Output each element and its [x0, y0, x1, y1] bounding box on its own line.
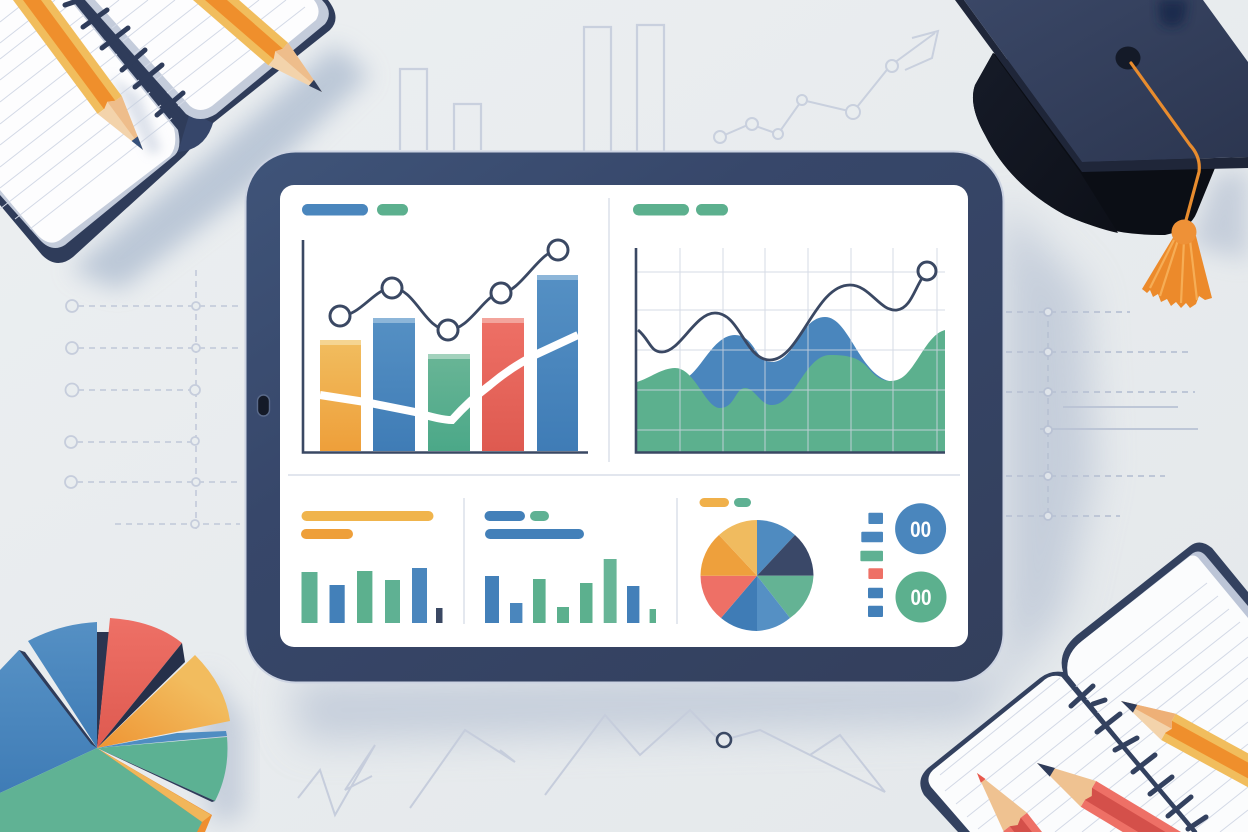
skull cap	[973, 53, 1215, 235]
tablet body	[246, 152, 1004, 682]
panel: pie and legend	[700, 498, 946, 631]
decorative left timeline	[65, 270, 240, 530]
green value badge	[896, 572, 946, 622]
notebook covers	[920, 542, 1248, 832]
blue area	[682, 317, 895, 452]
dark edge slice	[19, 650, 97, 748]
board spot	[1158, 0, 1188, 27]
bars	[302, 568, 442, 623]
graduation cap top right	[955, 0, 1248, 308]
tablet	[246, 152, 1004, 682]
large green slice	[0, 748, 202, 832]
decorative background bar chart	[400, 25, 664, 152]
cap button	[1116, 46, 1140, 70]
yellow slice	[97, 655, 230, 748]
right page	[95, 0, 319, 110]
header pills	[302, 204, 408, 216]
tassel	[1142, 220, 1212, 308]
blue slice	[28, 622, 97, 748]
tassel knob	[1172, 220, 1196, 244]
notebook bottom right	[920, 542, 1248, 832]
header pills	[700, 498, 751, 507]
header pills	[301, 511, 434, 539]
ruled lines	[940, 583, 1248, 832]
spiral binding	[65, 0, 183, 120]
large blue slice	[0, 650, 97, 793]
chart axes	[303, 240, 588, 452]
blue value badge: 00	[910, 517, 931, 542]
bars	[485, 559, 656, 623]
dark sliver	[97, 632, 109, 748]
dark wedge	[97, 643, 185, 748]
blue value badge	[895, 503, 946, 554]
yellow pencil	[1121, 701, 1248, 787]
hinge blob	[178, 112, 213, 152]
pie chart	[700, 520, 814, 631]
upper page	[1067, 556, 1248, 832]
orange edge	[97, 748, 212, 832]
dark trend line	[638, 271, 927, 360]
pencil shadow	[110, 75, 162, 155]
green value badge: 00	[910, 585, 932, 610]
header pills	[633, 204, 728, 216]
yellow edge	[100, 750, 211, 822]
decorative bottom line charts	[298, 710, 885, 815]
lower page	[928, 676, 1195, 832]
red pencil left	[977, 773, 1042, 832]
notebook covers	[0, 0, 336, 263]
red pencil middle	[1037, 763, 1181, 832]
decorative right timeline	[1006, 308, 1198, 520]
red slice	[97, 618, 182, 748]
header pills	[484, 511, 584, 539]
panel: combo bar chart	[302, 204, 588, 452]
spiral binding	[1063, 675, 1206, 832]
screen dividers	[288, 198, 960, 624]
tassel cord	[1131, 63, 1199, 224]
chart axes	[636, 248, 945, 452]
decorative background line chart with arrow	[714, 31, 938, 143]
pencil left	[13, 0, 143, 150]
screen	[280, 185, 968, 647]
end marker	[918, 262, 936, 280]
green area	[637, 330, 945, 452]
camera button	[258, 395, 270, 416]
skull cap side	[973, 53, 1118, 233]
white trend band	[320, 335, 578, 420]
blue sliver	[97, 731, 227, 748]
green slice	[97, 737, 228, 801]
upper page edge	[1067, 552, 1248, 832]
dark trend line with markers	[330, 240, 568, 340]
panel: small bar chart two	[484, 511, 656, 623]
mortarboard edge	[955, 0, 1248, 172]
dark edge under green	[97, 748, 215, 802]
panel: area chart	[633, 204, 945, 452]
left page edge	[0, 0, 179, 248]
grid	[637, 248, 945, 452]
decorative pie chart bottom left	[0, 618, 230, 832]
left page	[0, 0, 175, 243]
panel: small bar chart one	[301, 511, 442, 623]
bars	[320, 275, 578, 451]
mortarboard top	[964, 0, 1248, 162]
pencil right	[193, 0, 322, 92]
ruled lines	[0, 0, 305, 229]
legend swatches	[860, 513, 883, 617]
notebook top left	[0, 0, 336, 263]
right page edge	[85, 0, 329, 119]
